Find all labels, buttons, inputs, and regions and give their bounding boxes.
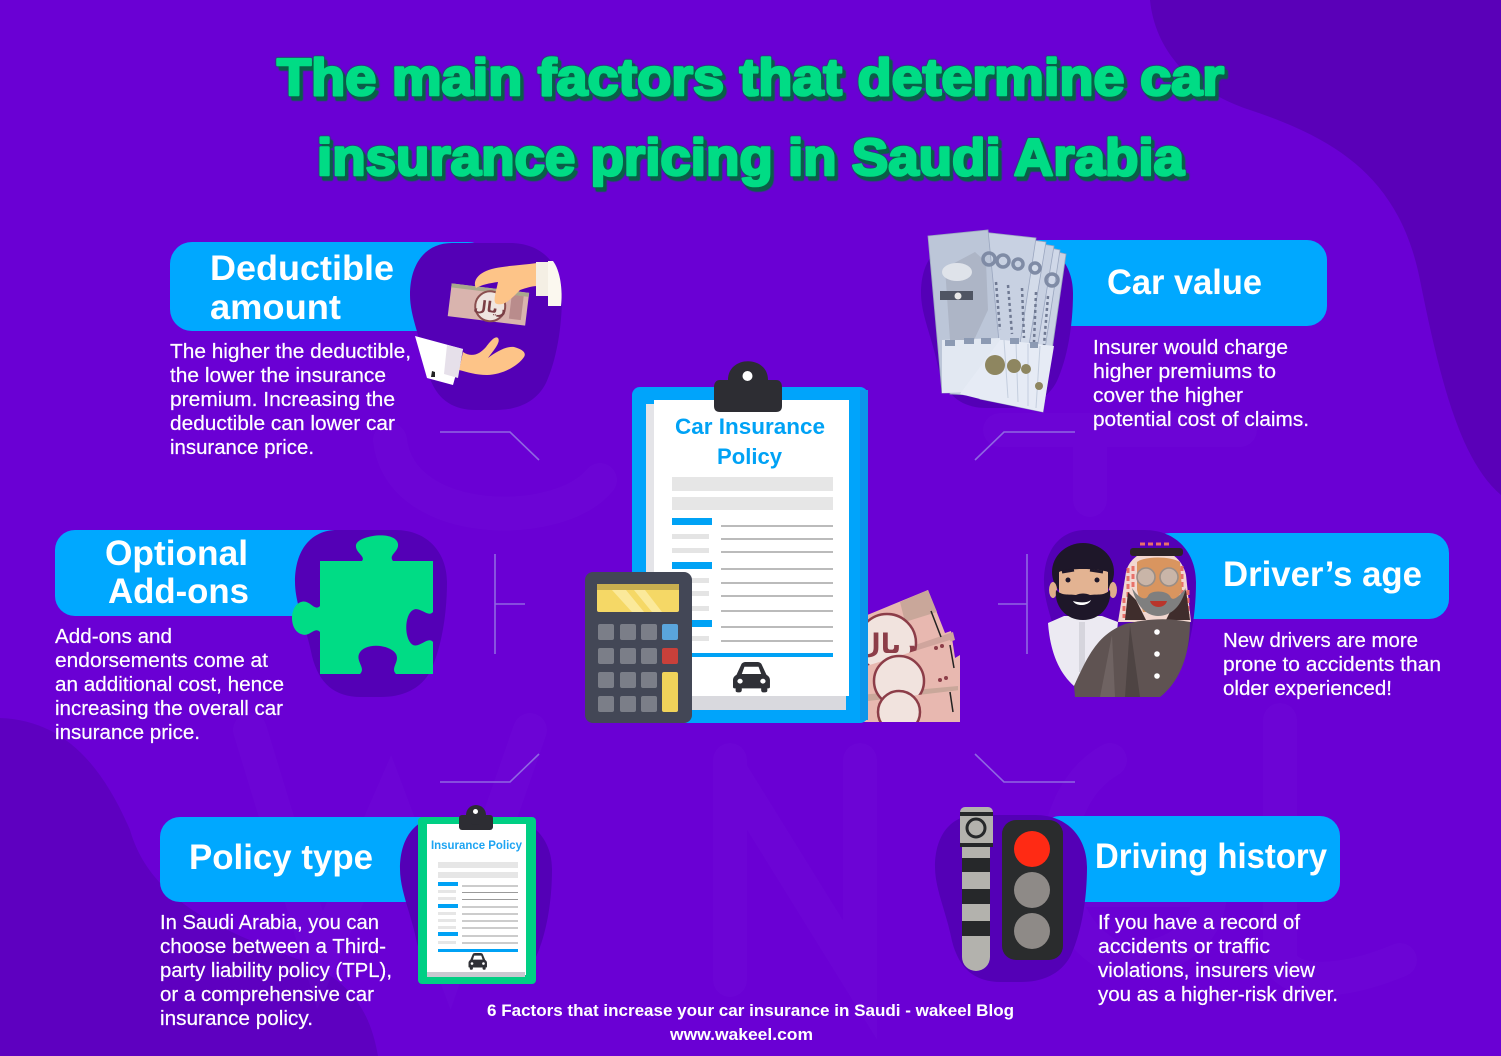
policy heading: Car Insurance: [675, 414, 825, 439]
text: optional add-ons: Add-ons and: [55, 626, 172, 648]
text: deductible amount: premium. Increasing the: [170, 389, 395, 411]
text: car value: Insurer would charge: [1093, 337, 1288, 359]
heading bar: driver's age: [1150, 533, 1449, 619]
document lines: [672, 477, 833, 657]
text: optional add-ons: increasing the overall car: [55, 698, 283, 720]
text: deductible amount: insurance price.: [170, 437, 314, 459]
text: driver's age: New drivers are more: [1223, 630, 1418, 652]
text: deductible amount: The higher the deductible,: [170, 341, 411, 363]
heading bar: deductible amount: [170, 242, 490, 331]
text: optional add-ons: insurance price.: [55, 722, 200, 744]
central illustration: car insurance policy clipboard: [632, 361, 868, 723]
central illustration: calculator: [585, 572, 692, 723]
text: driving history: [1098, 912, 1338, 1006]
text: policy type: [160, 912, 392, 1030]
text: policy type: choose between a Third-: [160, 936, 386, 958]
icon: traffic light and barrier post: [935, 807, 1087, 982]
text: optional add-ons: [55, 626, 284, 744]
panel: car value: [921, 230, 1327, 431]
panel: deductible amount: [170, 242, 562, 459]
icon: green insurance policy clipboard: Insurance Policy: [431, 840, 523, 852]
central illustration: riyal notes: ريال: [857, 629, 917, 660]
text: optional add-ons: an additional cost, hence: [55, 674, 284, 696]
text: deductible amount: [170, 341, 411, 459]
heading bar: policy type: [160, 817, 440, 902]
icon: puzzle piece: [292, 530, 447, 697]
text: driving history: you as a higher-risk driver.: [1098, 984, 1338, 1006]
panel: policy type: [160, 805, 552, 1030]
heading bar: deductible amount: Deductible: [210, 249, 394, 288]
text: policy type: In Saudi Arabia, you can: [160, 912, 379, 934]
icon: hands exchanging riyal note: [410, 243, 562, 410]
panel: driving history: [935, 807, 1340, 1006]
text: driver's age: [1223, 630, 1441, 700]
heading bar: optional add-ons: [55, 530, 355, 616]
connector lines: [440, 432, 1075, 782]
panel: driver's age: [1044, 530, 1449, 700]
title: The main factors that determine car: [277, 49, 1224, 107]
footer source text: www.wakeel.com: [669, 1026, 813, 1044]
young man in white thobe: [1048, 543, 1118, 686]
heading bar: driver's age: Driver’s age: [1223, 555, 1422, 594]
text: car value: cover the higher: [1093, 385, 1243, 407]
policy heading: [675, 414, 825, 469]
text: car value: [1093, 337, 1309, 431]
heading bar: car value: [1020, 240, 1327, 326]
footer source text: 6 Factors that increase your car insurance in Saudi - wakeel Blog: [487, 1002, 1014, 1020]
text: optional add-ons: endorsements come at: [55, 650, 268, 672]
policy heading: Policy: [717, 444, 783, 469]
icon: green insurance policy clipboard: [400, 805, 552, 984]
text: deductible amount: the lower the insurance: [170, 365, 386, 387]
text: driver's age: older experienced!: [1223, 678, 1392, 700]
older man in dark bisht and keffiyeh: [1074, 544, 1191, 697]
text: driving history: If you have a record of: [1098, 912, 1300, 934]
icon: hands exchanging riyal note: ريال: [473, 296, 508, 318]
text: deductible amount: deductible can lower car: [170, 413, 395, 435]
central illustration: riyal notes: [857, 590, 960, 736]
heading bar: driving history: [1040, 816, 1340, 902]
text: driver's age: prone to accidents than: [1223, 654, 1441, 676]
text: policy type: insurance policy.: [160, 1008, 313, 1030]
icon: fan of riyal notes: [921, 230, 1073, 412]
title: insurance pricing in Saudi Arabia: [317, 129, 1185, 187]
heading bar: car value: Car value: [1107, 263, 1262, 302]
icon: two Saudi men: [1044, 530, 1196, 697]
panel: optional add-ons: [55, 530, 447, 744]
heading bar: optional add-ons: Add-ons: [108, 572, 249, 611]
text: policy type: or a comprehensive car: [160, 984, 374, 1006]
clip: [714, 361, 782, 412]
text: driving history: accidents or traffic: [1098, 936, 1270, 958]
text: driving history: violations, insurers view: [1098, 960, 1316, 982]
heading bar: deductible amount: amount: [210, 288, 341, 327]
heading bar: optional add-ons: Optional: [105, 534, 248, 573]
text: car value: higher premiums to: [1093, 361, 1276, 383]
title: [277, 49, 1224, 187]
icon: car: [733, 662, 770, 692]
text: car value: potential cost of claims.: [1093, 409, 1309, 431]
heading: driving history: Driving history: [1095, 837, 1328, 876]
text: policy type: party liability policy (TPL),: [160, 960, 392, 982]
heading bar: policy type: Policy type: [189, 838, 373, 877]
footer source text: [487, 1002, 1014, 1044]
